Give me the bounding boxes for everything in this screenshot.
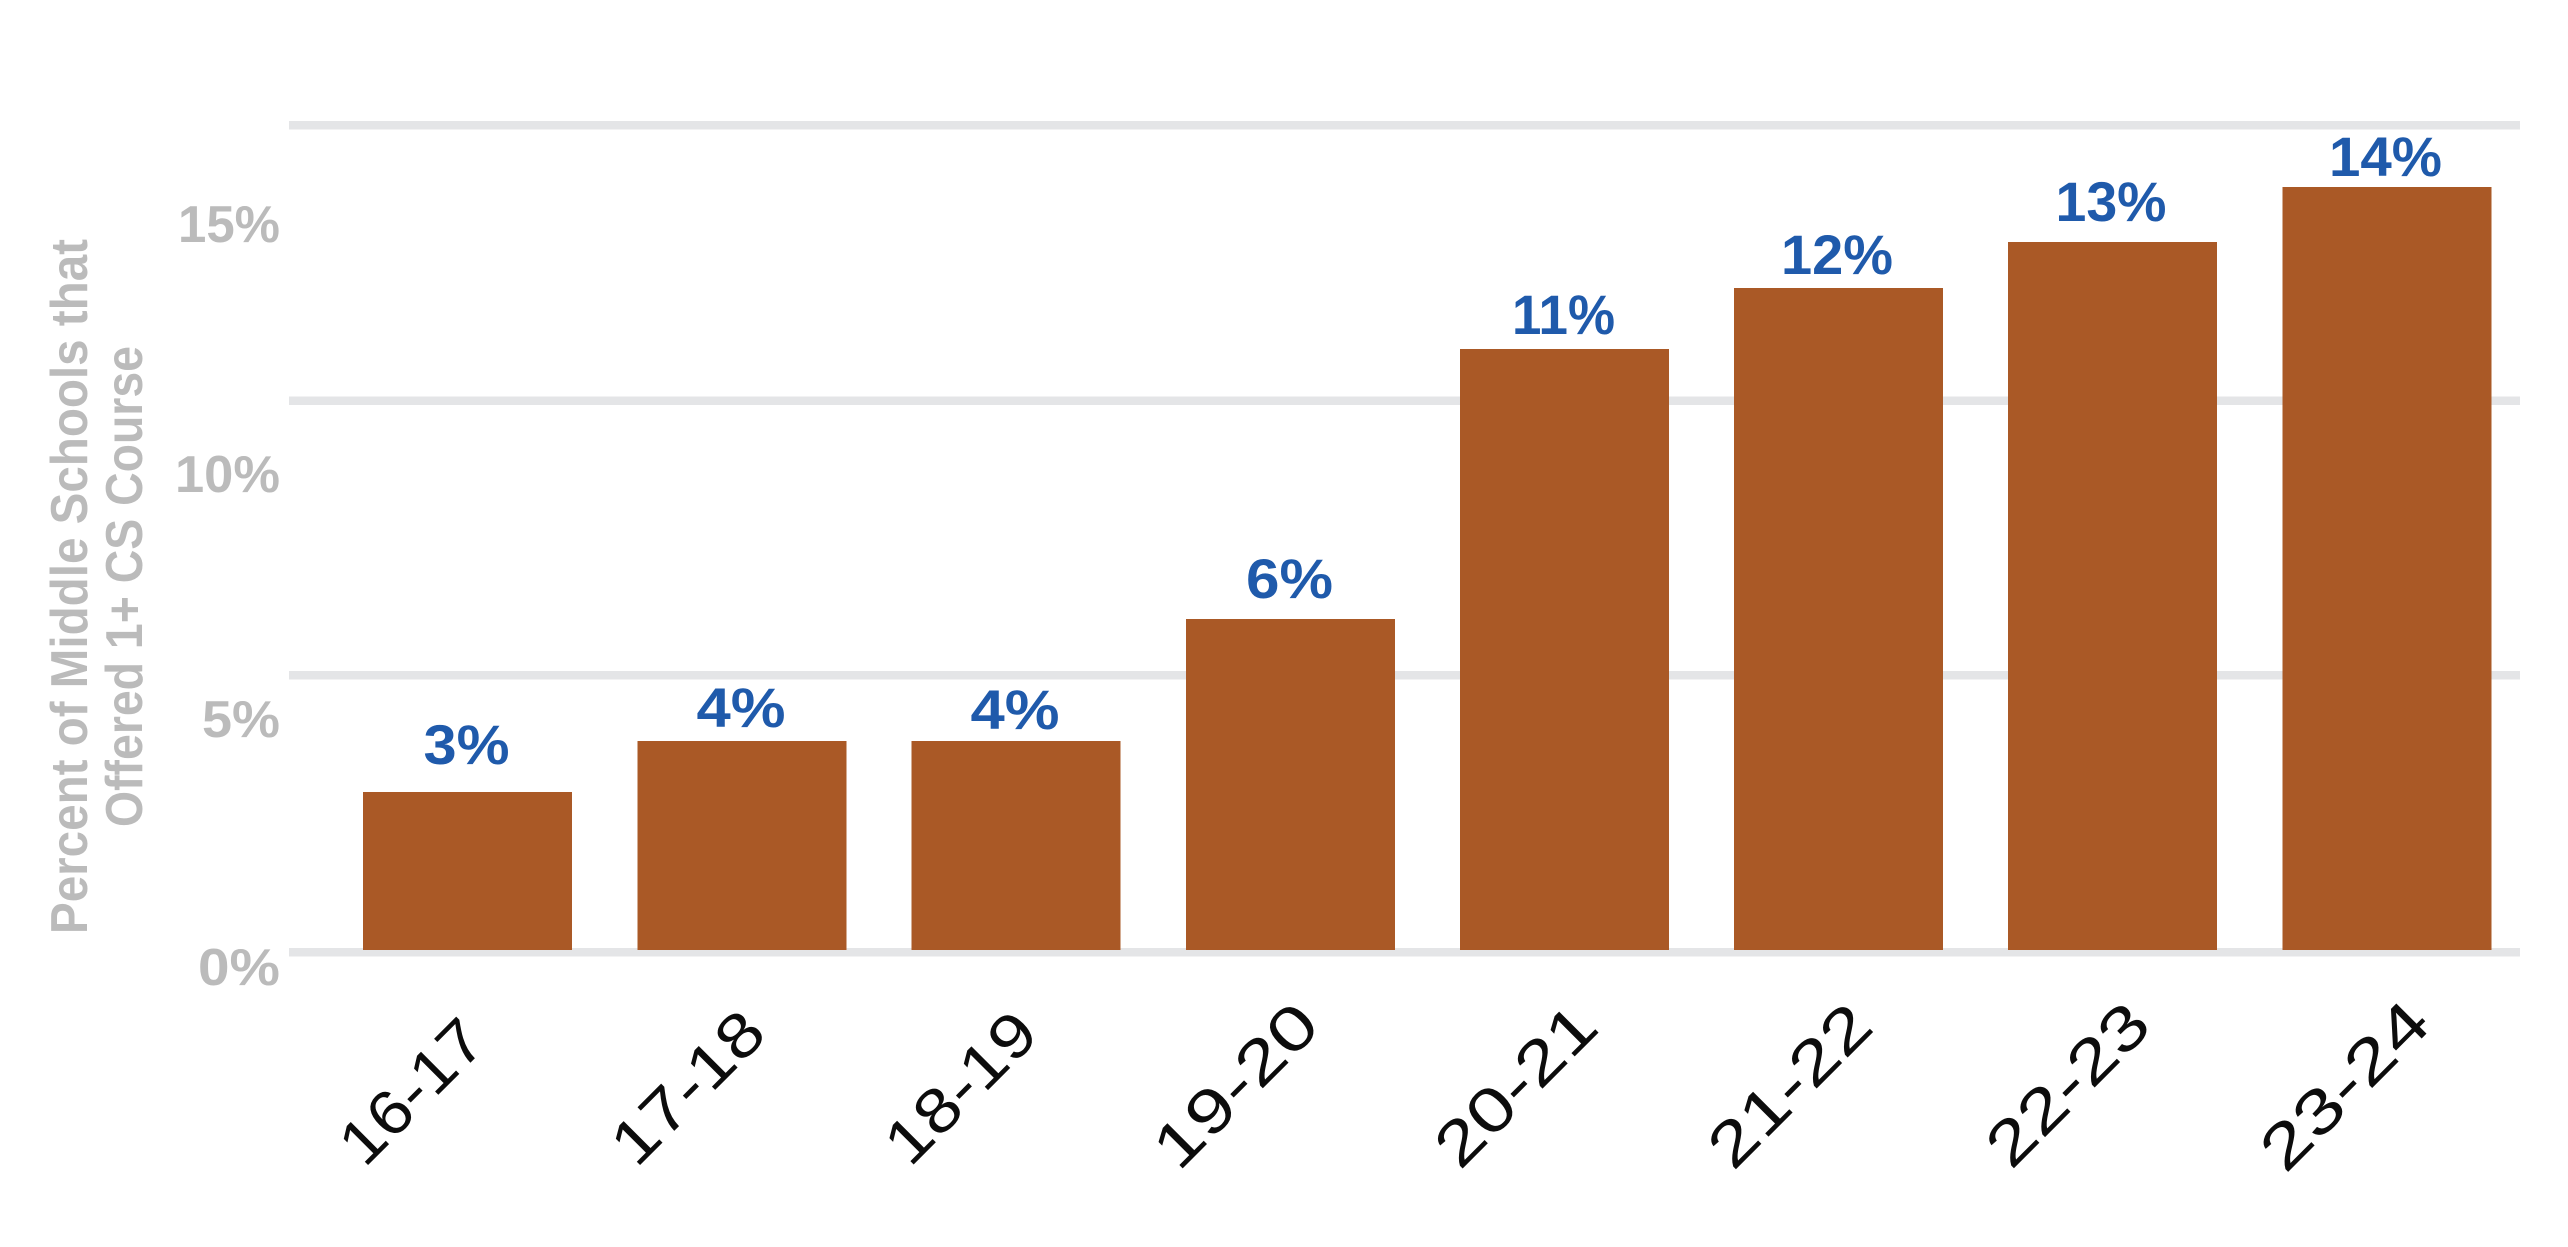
bar value labels: 11% [1512, 283, 1615, 346]
y-axis title [41, 239, 154, 934]
bar value labels [424, 125, 2442, 776]
x-axis category labels: 18-19 [871, 998, 1051, 1178]
bar value labels: 4% [696, 676, 786, 739]
bars [363, 187, 2492, 950]
bar value labels: 14% [2329, 125, 2442, 188]
x-axis category labels: 19-20 [1140, 990, 1333, 1183]
y-axis tick labels [175, 196, 280, 997]
bar value labels: 3% [424, 713, 510, 776]
x-axis category labels: 21-22 [1694, 990, 1886, 1182]
bar value labels: 12% [1781, 223, 1893, 286]
x-axis category labels: 22-23 [1972, 989, 2164, 1181]
y-axis title: Percent of Middle Schools that [41, 239, 99, 934]
y-axis tick labels: 5% [202, 691, 280, 749]
bar value labels: 6% [1246, 547, 1333, 610]
y-axis tick labels: 10% [175, 446, 280, 504]
y-axis tick labels: 0% [198, 939, 280, 997]
bar value labels: 4% [970, 678, 1060, 741]
x-axis category labels: 23-24 [2246, 987, 2444, 1185]
y-axis tick labels: 15% [178, 196, 280, 254]
x-axis category labels [325, 987, 2444, 1185]
bar value labels: 13% [2056, 170, 2166, 233]
x-axis category labels: 16-17 [325, 1005, 499, 1179]
x-axis category labels: 20-21 [1421, 991, 1611, 1181]
x-axis category labels: 17-18 [597, 997, 779, 1179]
y-axis title: Offered 1+ CS Course [96, 346, 154, 827]
